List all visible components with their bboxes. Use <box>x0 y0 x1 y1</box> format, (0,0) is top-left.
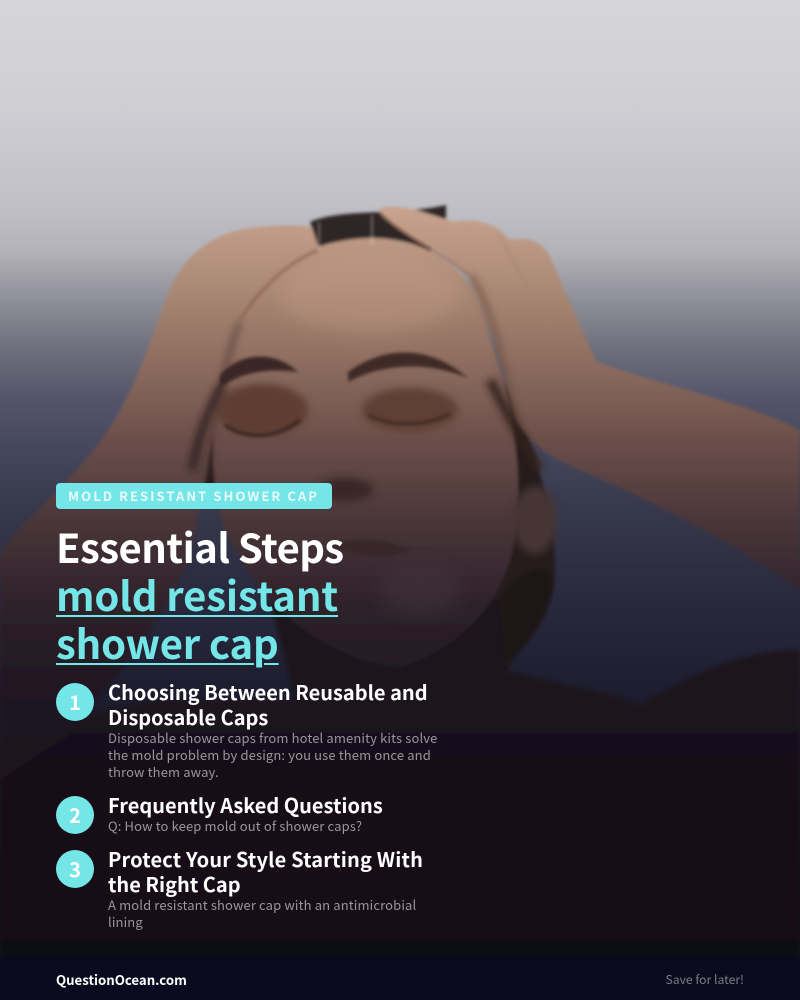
title: Essential Steps <box>56 517 344 575</box>
footer bar <box>0 956 800 1000</box>
left arm <box>0 225 320 780</box>
step 3 number <box>56 850 94 888</box>
step 1 description <box>108 728 437 781</box>
neck <box>270 600 510 720</box>
step 2 number <box>56 796 94 834</box>
step 3 heading <box>108 844 423 898</box>
step 2 <box>56 790 383 835</box>
site name: QuestionOcean.com <box>56 970 187 989</box>
topic badge <box>56 483 332 509</box>
step 3 description: lining <box>108 912 143 931</box>
step 1 heading <box>108 677 428 731</box>
step 3 heading: Protect Your Style Starting With <box>108 844 423 873</box>
step 2 description: Q: How to keep mold out of shower caps? <box>108 816 362 835</box>
title <box>56 517 344 671</box>
step 1 heading: Disposable Caps <box>108 702 268 731</box>
title: shower cap <box>56 613 279 671</box>
step 1 <box>56 677 437 781</box>
step 3 description: A mold resistant shower cap with an antimicrobial <box>108 895 416 914</box>
step 1 number <box>56 683 94 721</box>
step 1 heading: Choosing Between Reusable and <box>108 677 428 706</box>
step 3 heading: the Right Cap <box>108 869 241 898</box>
body <box>0 205 800 960</box>
step 1 description: throw them away. <box>108 762 219 781</box>
shoulders <box>0 650 800 960</box>
step 1 number: 1 <box>69 687 81 716</box>
face <box>213 238 518 668</box>
step 2 number: 2 <box>69 800 81 829</box>
topic badge: MOLD RESISTANT SHOWER CAP <box>68 486 319 505</box>
save note: Save for later! <box>665 970 744 988</box>
hair back <box>190 365 555 665</box>
step 1 description: Disposable shower caps from hotel amenity kits solve <box>108 728 437 747</box>
right hand and arm <box>378 207 800 590</box>
hair top <box>310 205 446 252</box>
title: mold resistant <box>56 565 338 623</box>
step 3 <box>56 844 423 931</box>
facial features <box>192 215 557 668</box>
step 1 description: the mold problem by design: you use them once and <box>108 745 431 764</box>
step 3 description <box>108 895 416 931</box>
step 2 heading: Frequently Asked Questions <box>108 790 383 819</box>
step 3 number: 3 <box>69 854 81 883</box>
